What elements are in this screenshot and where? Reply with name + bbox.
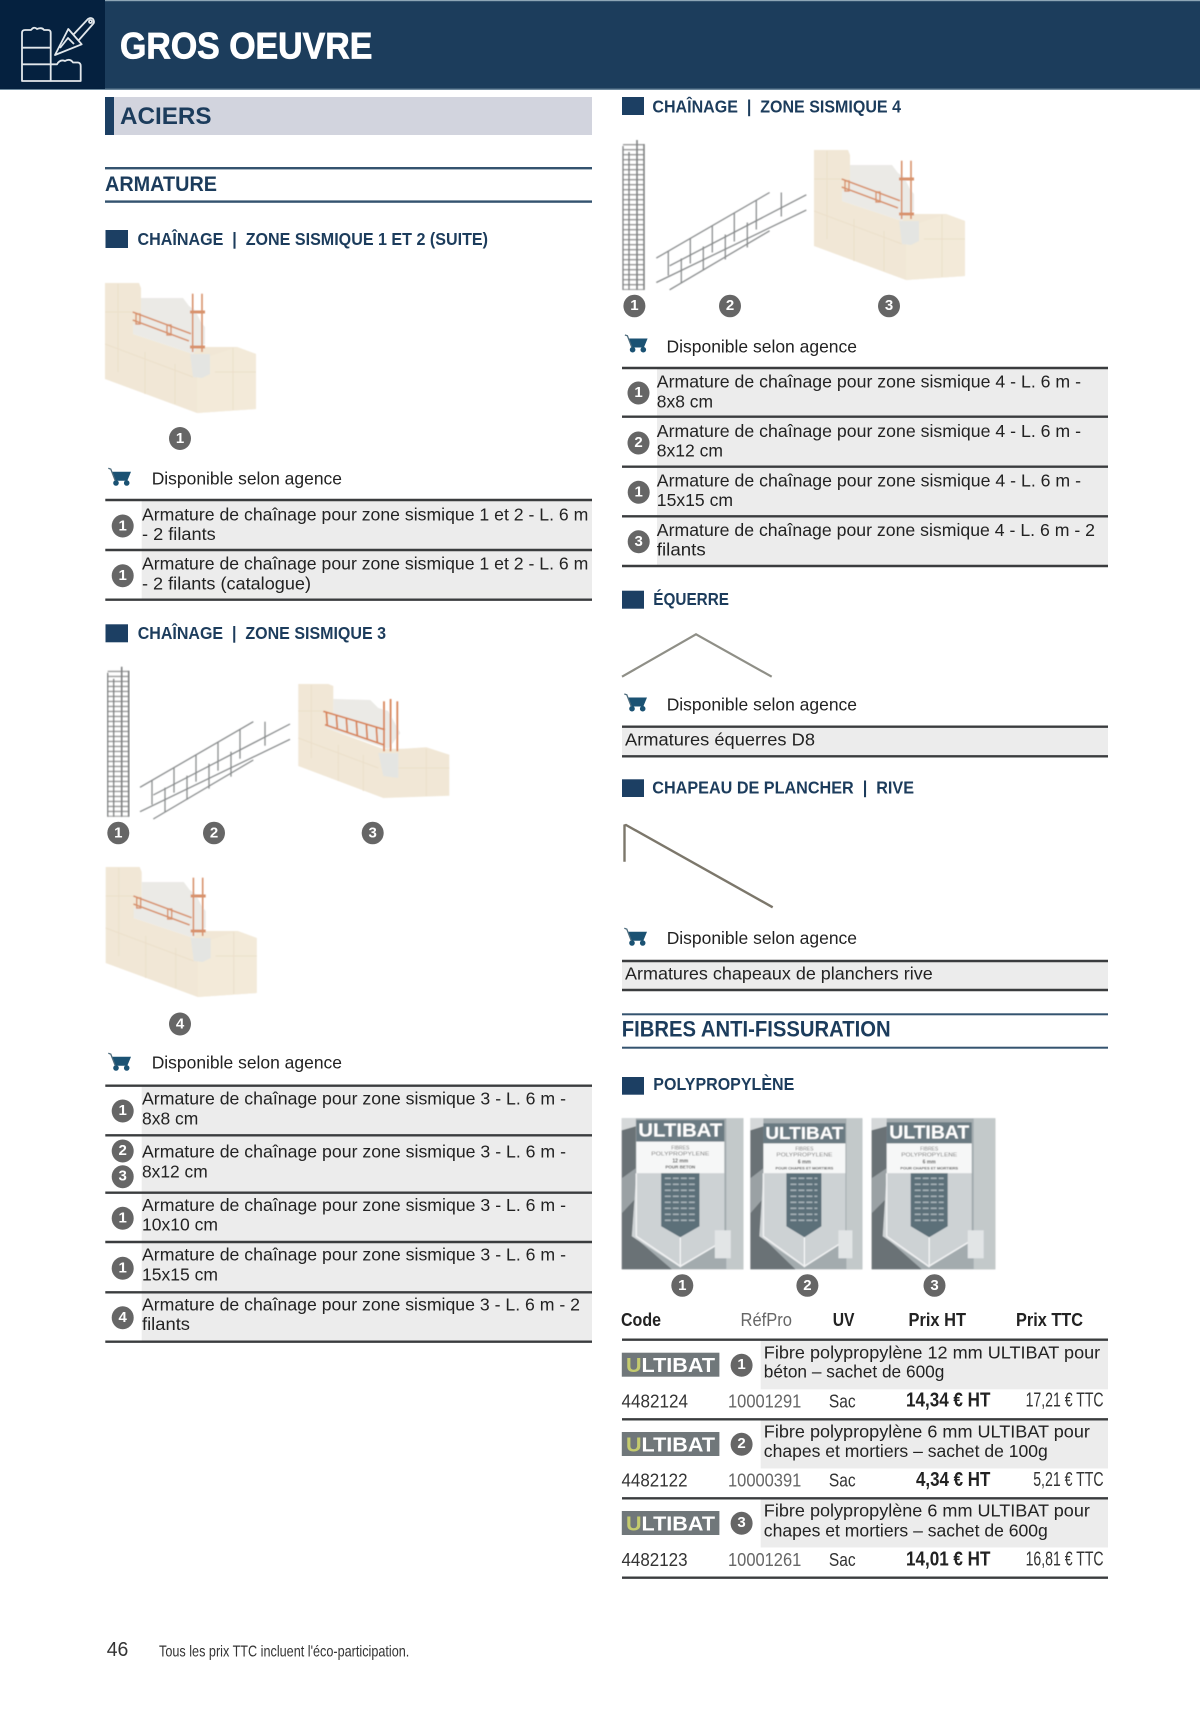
header banner — [0, 0, 1200, 90]
badges row: products: 2 — [803, 1277, 812, 1294]
table: zone 4 — [622, 368, 1108, 566]
availability: zone 4: Disponible selon agence — [666, 336, 857, 356]
subheading: chapeau de plancher: CHAPEAU DE PLANCHER | RIVE — [652, 777, 914, 797]
footer: page number and note — [107, 1639, 409, 1661]
product row: fibre 6 mm 600g: Fibre polypropylène 6 mm ULTIBAT pour — [764, 1501, 1090, 1521]
table: zone 3: Armature de chaînage pour zone sismique 3 - L. 6 m - — [142, 1195, 566, 1215]
illustration: wall zone 4 — [814, 150, 965, 280]
table: zone 3: 8x12 cm — [142, 1161, 208, 1181]
table: zone 3: Armature de chaînage pour zone sismique 3 - L. 6 m - — [142, 1245, 566, 1265]
table: zone 3: 8x8 cm — [142, 1108, 198, 1128]
product row: fibre 12 mm 600g: Sac — [829, 1391, 856, 1411]
product row: fibre 6 mm 600g: chapes et mortiers – sachet de 600g — [764, 1521, 1048, 1541]
logo: ultibat: ULTIBAT — [626, 1355, 715, 1377]
badges row zone 3: 3 — [369, 824, 377, 842]
table: zone 3: filants — [142, 1314, 190, 1334]
product row: fibre 6 mm 100g: Fibre polypropylène 6 mm ULTIBAT pour — [764, 1421, 1090, 1441]
product row: fibre 12 mm 600g: 14,34 € HT — [906, 1389, 991, 1412]
illustration: rebar column zone 3 — [108, 667, 129, 817]
product image: bag 12 mm: POLYPROPYLENE — [651, 1151, 710, 1157]
badge 1 — [169, 427, 191, 450]
table: zone 3: 2 — [119, 1142, 127, 1159]
availability: chapeau: Disponible selon agence — [667, 928, 857, 948]
table: zone 4: filants — [657, 540, 706, 560]
table header: product columns: RéfPro — [740, 1310, 792, 1330]
product image: bag 12 mm: FIBRES — [671, 1145, 690, 1151]
illustration: rebar column zone 4 — [623, 140, 644, 290]
table: zone 1 et 2: - 2 filants (catalogue) — [142, 573, 311, 593]
product row: fibre 6 mm 100g: 5,21 € TTC — [1033, 1468, 1104, 1491]
table: zone 1 et 2: Armature de chaînage pour zone sismique 1 et 2 - L. 6 m — [142, 554, 588, 574]
table: zone 3: 4 — [119, 1309, 128, 1326]
product image: bag 6 mm 100g: POUR CHAPES ET MORTIERS — [776, 1165, 834, 1170]
product row: fibre 6 mm 100g — [622, 1419, 1108, 1491]
product image: bag 6 mm 100g: ULTIBAT — [765, 1123, 844, 1143]
table: zone 3: 1 — [119, 1210, 127, 1226]
table: zone 3: 10x10 cm — [142, 1215, 218, 1235]
table: zone 1 et 2 — [105, 500, 592, 600]
heading: fibres anti-fissuration: FIBRES ANTI-FISSURATION — [622, 1017, 891, 1042]
illustration: angle bar — [622, 634, 772, 677]
badges row zone 4: 1 — [630, 297, 639, 314]
badges row zone 3: 2 — [210, 824, 218, 842]
product row: fibre 12 mm 600g: 4482124 — [622, 1391, 688, 1411]
table: zone 4: 15x15 cm — [657, 490, 733, 510]
product image: bag 6 mm 600g: ULTIBAT — [889, 1122, 969, 1142]
heading: armature: ARMATURE — [105, 173, 217, 196]
product image: bag 6 mm 600g: POUR CHAPES ET MORTIERS — [900, 1165, 958, 1170]
subheading: zone 1 et 2: CHAÎNAGE | ZONE SISMIQUE 1 ET 2 (SUITE) — [138, 228, 488, 249]
product row: fibre 6 mm 600g: 3 — [737, 1514, 746, 1531]
table: zone 3: Armature de chaînage pour zone sismique 3 - L. 6 m - — [142, 1089, 566, 1109]
badges row: products: 1 — [678, 1277, 686, 1294]
product row: fibre 6 mm 600g: 14,01 € HT — [906, 1547, 991, 1570]
subheading: zone 3: CHAÎNAGE | ZONE SISMIQUE 3 — [138, 622, 386, 643]
badge 1: 1 — [176, 430, 184, 447]
badges row: products — [671, 1274, 946, 1297]
table: zone 4: Armature de chaînage pour zone sismique 4 - L. 6 m - 2 — [657, 520, 1095, 540]
product row: fibre 6 mm 100g: 10000391 — [728, 1471, 801, 1491]
product row: fibre 6 mm 600g: 16,81 € TTC — [1026, 1547, 1104, 1570]
table: zone 4: 3 — [635, 533, 643, 550]
table: zone 4: Armature de chaînage pour zone sismique 4 - L. 6 m - — [657, 470, 1081, 490]
product row: fibre 12 mm 600g: 17,21 € TTC — [1026, 1389, 1104, 1412]
product row: fibre 6 mm 600g: 10001261 — [728, 1550, 801, 1570]
product row: fibre 6 mm 600g: Sac — [829, 1550, 856, 1570]
badges row zone 3: 1 — [114, 824, 122, 842]
table: équerre — [622, 727, 1108, 756]
table: zone 3: Armature de chaînage pour zone sismique 3 - L. 6 m - 2 — [142, 1294, 580, 1314]
table: zone 3: 1 — [119, 1260, 127, 1276]
illustration: hooked bar — [624, 825, 773, 907]
product row: fibre 6 mm 600g — [622, 1498, 1108, 1578]
table: zone 3 — [105, 1086, 592, 1342]
logo: ultibat: ULTIBAT — [626, 1513, 715, 1535]
product row: fibre 6 mm 100g: chapes et mortiers – sachet de 100g — [764, 1441, 1048, 1461]
table header: product columns: Prix TTC — [1016, 1310, 1083, 1330]
product image: bag 6 mm 600g: 6 mm — [923, 1159, 936, 1165]
product image: bag 6 mm 600g: FIBRES — [920, 1146, 939, 1152]
table header: product columns: UV — [833, 1310, 854, 1330]
badges row zone 4: 3 — [885, 297, 893, 314]
table: zone 3: 1 — [119, 1102, 127, 1119]
badges row: products: 3 — [930, 1277, 939, 1294]
table: zone 4: Armature de chaînage pour zone sismique 4 - L. 6 m - — [657, 372, 1081, 392]
table: zone 3: 15x15 cm — [142, 1264, 218, 1284]
table: zone 1 et 2: - 2 filants — [142, 524, 216, 544]
product row: fibre 12 mm 600g: Fibre polypropylène 12 mm ULTIBAT pour — [764, 1342, 1100, 1362]
table header: product columns: Code — [621, 1310, 661, 1330]
subheading: équerre — [622, 588, 729, 609]
table: zone 4: 2 — [634, 434, 643, 451]
subheading: équerre: ÉQUERRE — [653, 588, 729, 609]
subheading: zone 4: CHAÎNAGE | ZONE SISMIQUE 4 — [652, 95, 901, 116]
product image: bag 6 mm 100g: POLYPROPYLENE — [776, 1152, 833, 1158]
section heading: aciers — [105, 97, 592, 135]
table: zone 3: Armature de chaînage pour zone sismique 3 - L. 6 m - — [142, 1142, 566, 1162]
product image: bag 6 mm 100g — [750, 1118, 862, 1269]
table: zone 4: 1 — [634, 384, 643, 401]
table: zone 1 et 2: Armature de chaînage pour zone sismique 1 et 2 - L. 6 m — [142, 504, 588, 524]
badges row zone 4 — [623, 295, 900, 317]
illustration: rebar beam zone 3 — [140, 722, 290, 819]
table: zone 4: 8x12 cm — [657, 441, 723, 461]
logo: ultibat: ULTIBAT — [626, 1434, 715, 1456]
product row: fibre 12 mm 600g: 1 — [737, 1356, 746, 1373]
product image: bag 12 mm: POUR BETON — [665, 1164, 695, 1169]
product image: bag 12 mm: 12 mm — [672, 1158, 689, 1164]
product image: bag 6 mm 100g: FIBRES — [795, 1146, 814, 1152]
product row: fibre 6 mm 100g: 4482122 — [622, 1471, 688, 1491]
section heading: aciers: ACIERS — [120, 103, 212, 130]
table header: product columns — [621, 1310, 1083, 1330]
footer: page number and note: 46 — [107, 1639, 128, 1661]
availability: équerre: Disponible selon agence — [667, 695, 857, 715]
product image: bag 12 mm: ULTIBAT — [638, 1119, 723, 1140]
product row: fibre 12 mm 600g: béton – sachet de 600g — [764, 1362, 944, 1382]
product row: fibre 12 mm 600g: 10001291 — [728, 1391, 801, 1411]
table: zone 3: 3 — [119, 1168, 127, 1184]
table: chapeau: Armatures chapeaux de planchers rive — [625, 963, 933, 983]
table: équerre: Armatures équerres D8 — [625, 730, 815, 750]
illustration: wall with ladder beam zone 3 — [298, 684, 449, 798]
product image: bag 12 mm — [622, 1118, 744, 1269]
product image: bag 6 mm 600g: POLYPROPYLENE — [901, 1152, 958, 1158]
badge 4 — [169, 1012, 191, 1036]
badges row zone 3 — [107, 822, 384, 844]
badges row zone 4: 2 — [726, 297, 734, 314]
product image: bag 6 mm 100g: 6 mm — [798, 1159, 811, 1165]
availability: zone 3: Disponible selon agence — [152, 1053, 342, 1073]
subheading: polypropylène: POLYPROPYLÈNE — [653, 1073, 794, 1094]
table: zone 1 et 2: 1 — [119, 567, 127, 584]
product row: fibre 6 mm 100g: Sac — [829, 1471, 856, 1491]
product row: fibre 6 mm 100g: 4,34 € HT — [916, 1468, 991, 1491]
illustration: wall zone 1 et 2 — [105, 283, 256, 413]
product row: fibre 6 mm 100g: 2 — [737, 1435, 746, 1452]
icon: bricks and trowel — [22, 18, 94, 81]
product image: bag 6 mm 600g — [872, 1118, 995, 1269]
badge 4: 4 — [176, 1016, 185, 1032]
table: chapeau — [622, 961, 1108, 990]
illustration: wall zone 3 variant — [106, 867, 257, 997]
product row: fibre 12 mm 600g — [622, 1340, 1108, 1412]
table: zone 4: 8x8 cm — [657, 391, 713, 411]
illustration: rebar beam zone 4 — [656, 192, 806, 290]
product row: fibre 6 mm 600g: 4482123 — [622, 1550, 688, 1570]
table: zone 4: Armature de chaînage pour zone sismique 4 - L. 6 m - — [657, 421, 1081, 441]
availability: zone 1 et 2: Disponible selon agence — [152, 469, 342, 489]
table: zone 4: 1 — [635, 484, 643, 500]
table: zone 1 et 2: 1 — [119, 518, 127, 534]
footer: page number and note: Tous les prix TTC incluent l'éco-participation. — [159, 1644, 409, 1660]
title: GROS OEUVRE — [120, 25, 372, 66]
table header: product columns: Prix HT — [908, 1310, 966, 1330]
